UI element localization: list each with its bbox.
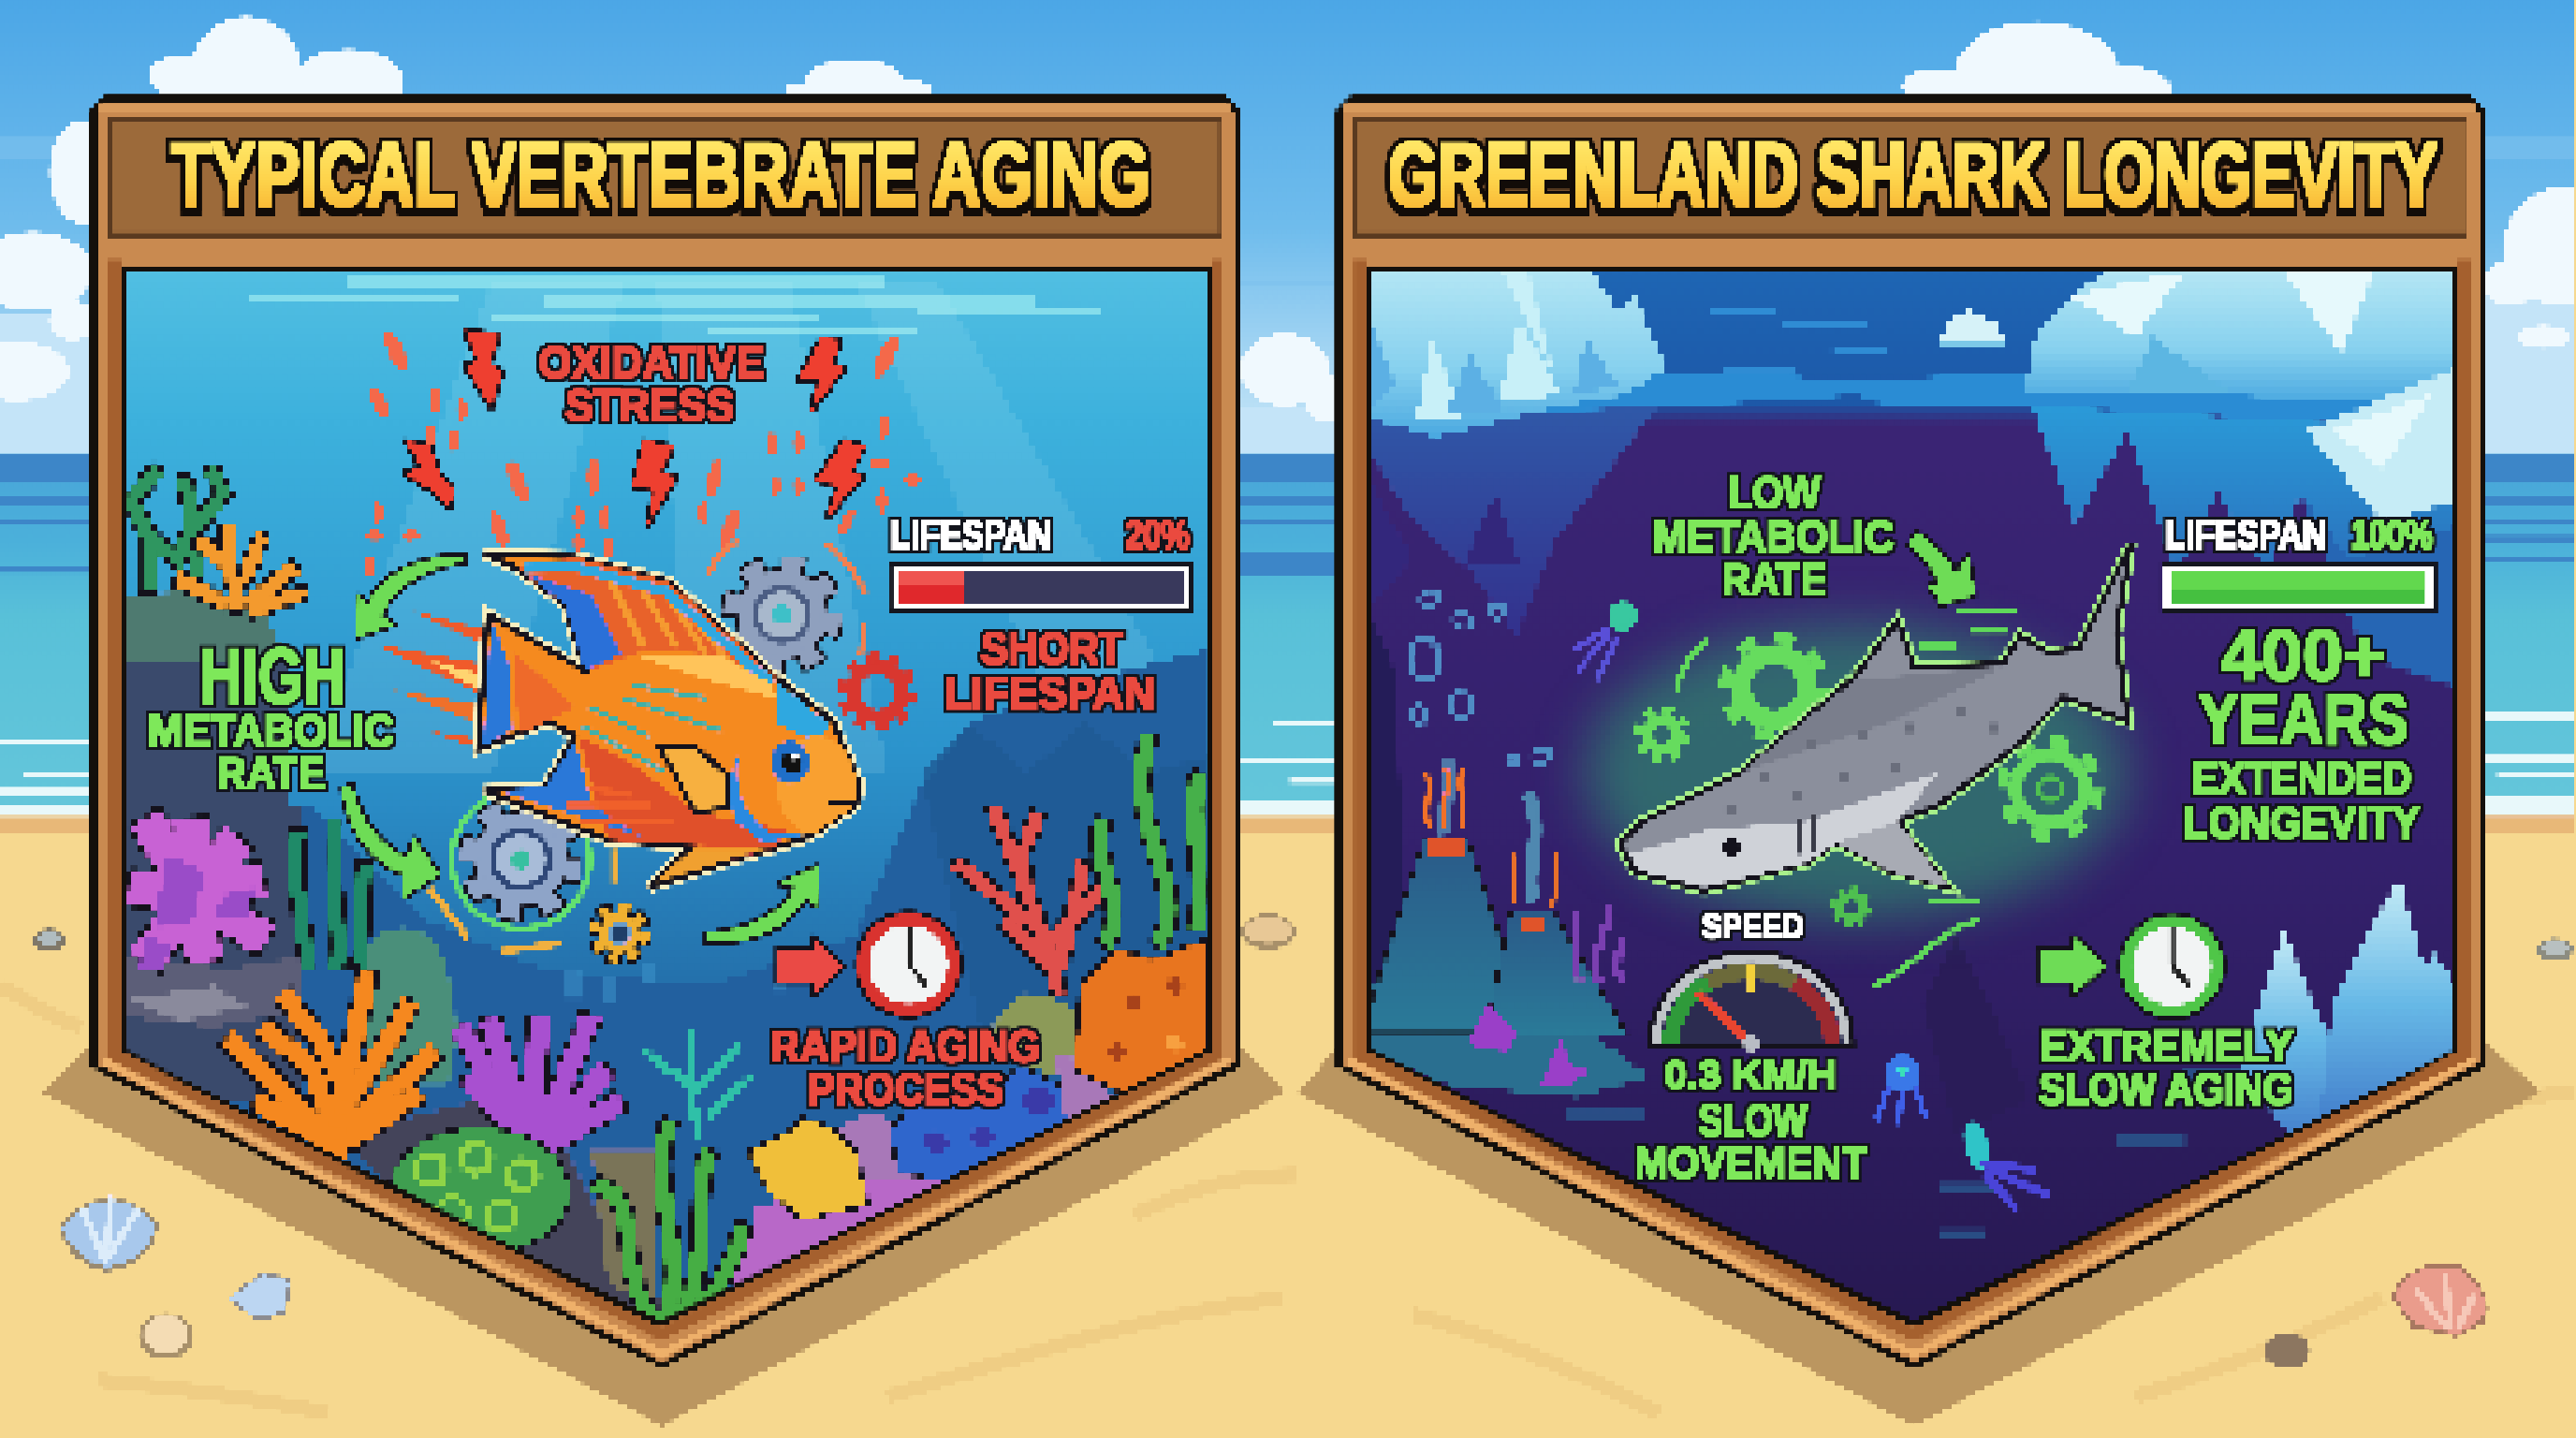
foreground: fish, gears, stress marks, icons [342,330,1193,1019]
skin speckles [1725,707,1998,815]
arrow to fish [707,866,818,942]
tail [483,620,513,746]
oxidative stress label: OXIDATIVE [539,338,764,389]
lightning bolts [404,330,864,526]
volcano vents and smoke [1426,759,1558,930]
header plate [109,118,1222,240]
eye [771,741,809,784]
rock upper left [122,592,289,814]
seabed [1367,986,1649,1097]
high metabolic rate label: HIGH [200,632,345,720]
lifespan bar 20% [889,562,1193,614]
low metabolic rate label: LOW [1728,467,1821,518]
dark seaweed [297,822,365,970]
deep water background [1360,263,2465,1339]
highlight [640,657,775,698]
lifespan heading: 20% [1125,512,1190,558]
green tall seaweed [1099,736,1199,945]
shark glow [1586,624,2128,920]
volcano small [1486,914,1627,1035]
gills [1801,815,1812,855]
bubbles [1410,590,1549,764]
dorsal fin [518,557,775,677]
lifespan heading [890,512,1190,558]
purple coral [128,818,266,970]
purple seaweed [1573,907,1621,986]
purple branch coral [460,1016,621,1149]
panel labels [1388,125,2438,1188]
sand [0,816,2576,1438]
head band [775,681,829,742]
green rock [355,928,456,1084]
eye [1723,837,1740,858]
yellow coral [749,1119,868,1219]
anal fin [655,849,766,882]
small floating ice [1940,309,2004,350]
body outline [478,553,859,888]
blue right side water [2300,493,2465,690]
low metabolic rate label: RATE [1721,554,1827,605]
needle [1697,992,1751,1043]
iceberg left [1367,268,1666,437]
short lifespan label: SHORT [981,624,1124,674]
clock: rapid aging [855,910,962,1019]
gear: small orange [594,909,644,958]
400+ years label: YEARS [2198,680,2408,760]
teal stripes [583,685,723,772]
foreground: shark, gears, gauge, icons [1426,533,2437,1211]
reef backdrop and corals [115,263,1216,1339]
short lifespan label [944,624,1155,718]
teal coral [644,1032,753,1137]
mouth [829,801,857,803]
oxidative stress label: STRESS [565,380,735,431]
sky dither band [0,138,2576,287]
400+ years label: 400+ [2221,616,2385,697]
motion lines [1676,611,2017,986]
green arrow [2039,936,2104,996]
speed value and slow movement [1634,1052,1866,1188]
extremely slow aging label [2039,1021,2293,1114]
gear: upper grey [733,565,831,664]
seabed blue patches [1569,1068,2267,1240]
background rock silhouettes [122,649,1209,1331]
panel: typical vertebrate aging [94,98,1237,1365]
gear: lower grey with green halo [452,790,590,929]
oxidative stress label [539,338,764,431]
ice spikes [2239,875,2456,1151]
high metabolic rate label [148,632,394,799]
fin shade [1837,822,1949,888]
arrows: metabolic cycle [342,555,818,942]
jellyfish lower [1876,1055,1925,1125]
volcano large [1367,838,1553,1032]
jellyfish upper [1573,601,1638,681]
dark left column [1367,608,1405,1003]
panel frame [94,98,1237,1365]
extremely slow aging label: SLOW AGING [2039,1064,2293,1114]
low metabolic rate label: METABOLIC [1653,512,1895,563]
extended longevity label [2184,754,2420,848]
gear: red [842,657,912,726]
orange coral upper left [178,526,305,611]
lifespan heading: LIFESPAN [890,512,1051,558]
green brain coral [391,1129,568,1254]
speed label: SPEED [1702,907,1804,946]
blue coral [890,1068,1071,1180]
extremely slow aging label: EXTREMELY [2039,1021,2293,1072]
sparks [365,330,923,579]
extended longevity label: EXTENDED [2191,754,2411,804]
squid [1959,1119,2050,1211]
water line band [1367,372,2456,437]
speed value and slow movement: 0.3 KM/H [1664,1052,1837,1096]
rapid aging label: RAPID AGING [770,1021,1040,1072]
panel shadows on sand [41,1035,2539,1426]
speed value and slow movement: SLOW [1699,1095,1808,1146]
back shade [1741,668,2002,772]
high metabolic rate label: METABOLIC [148,706,394,756]
pink-tan rock [809,1110,943,1199]
ground patches under fish [567,961,788,1001]
fish [374,553,859,888]
water background [126,271,1208,983]
surface light and rays [246,272,1183,772]
olive rock [977,992,1088,1077]
arctic backdrop [1360,263,2465,1339]
rock lower left [122,805,302,1101]
panel labels [148,125,1190,1114]
orange branch coral [227,973,435,1157]
small yellow arrows near lower gear [429,849,614,951]
panel: greenland shark longevity [1339,98,2482,1365]
belly light [1630,772,1939,888]
surf foam [0,713,2576,818]
lifespan heading: LIFESPAN [2165,512,2326,558]
rapid aging label: PROCESS [809,1064,1003,1114]
lifespan heading: 100% [2351,512,2433,558]
rapid aging label [770,1021,1040,1114]
purple corals [1467,1003,1590,1088]
extended longevity label: LONGEVITY [2184,798,2420,848]
ice chunk right [2306,368,2456,522]
dark rock [345,1101,690,1323]
header plate [1354,118,2467,240]
shark body outline [1620,544,2130,890]
submerged ice left [1367,407,1656,636]
red coral [956,809,1104,994]
high metabolic rate label: RATE [217,748,326,799]
title: TYPICAL VERTEBRATE AGING [171,125,1150,225]
water stripes [1708,305,1888,372]
clock: slow aging [2117,912,2226,1020]
submerged ice right [2032,406,2456,575]
ocean [0,452,2576,816]
low metabolic rate label [1653,467,1895,605]
lifespan bar 100% [2160,562,2437,614]
iceberg right [2024,271,2456,403]
shark [1620,544,2130,890]
clouds [0,17,2576,457]
short lifespan label: LIFESPAN [944,668,1155,718]
arrow to gear [342,785,439,897]
arrow to metabolic label [357,555,465,638]
small orange arrows around gear [708,540,866,654]
fish colour regions [483,557,856,882]
green gears [1638,638,2098,925]
purple lump [1055,1051,1114,1134]
seaweed upper left [131,468,224,592]
flame streaks [374,611,493,749]
green kelp [594,1121,742,1323]
arrow: low metabolic to shark [1909,533,1975,605]
pectoral fin [659,746,726,812]
speed value and slow movement: MOVEMENT [1634,1137,1866,1188]
orange sponge [1076,940,1208,1104]
belly and lower fin [578,736,788,849]
panel frame [1339,98,2482,1365]
shells and pebbles [33,914,2572,1369]
oxidative stress: sparks and lightning [365,330,923,579]
dark silhouettes [1922,936,2029,1134]
red arrow [777,936,842,996]
purple rock bottom [726,1175,986,1314]
400+ years label [2198,616,2408,760]
speed gauge [1649,951,1853,1051]
